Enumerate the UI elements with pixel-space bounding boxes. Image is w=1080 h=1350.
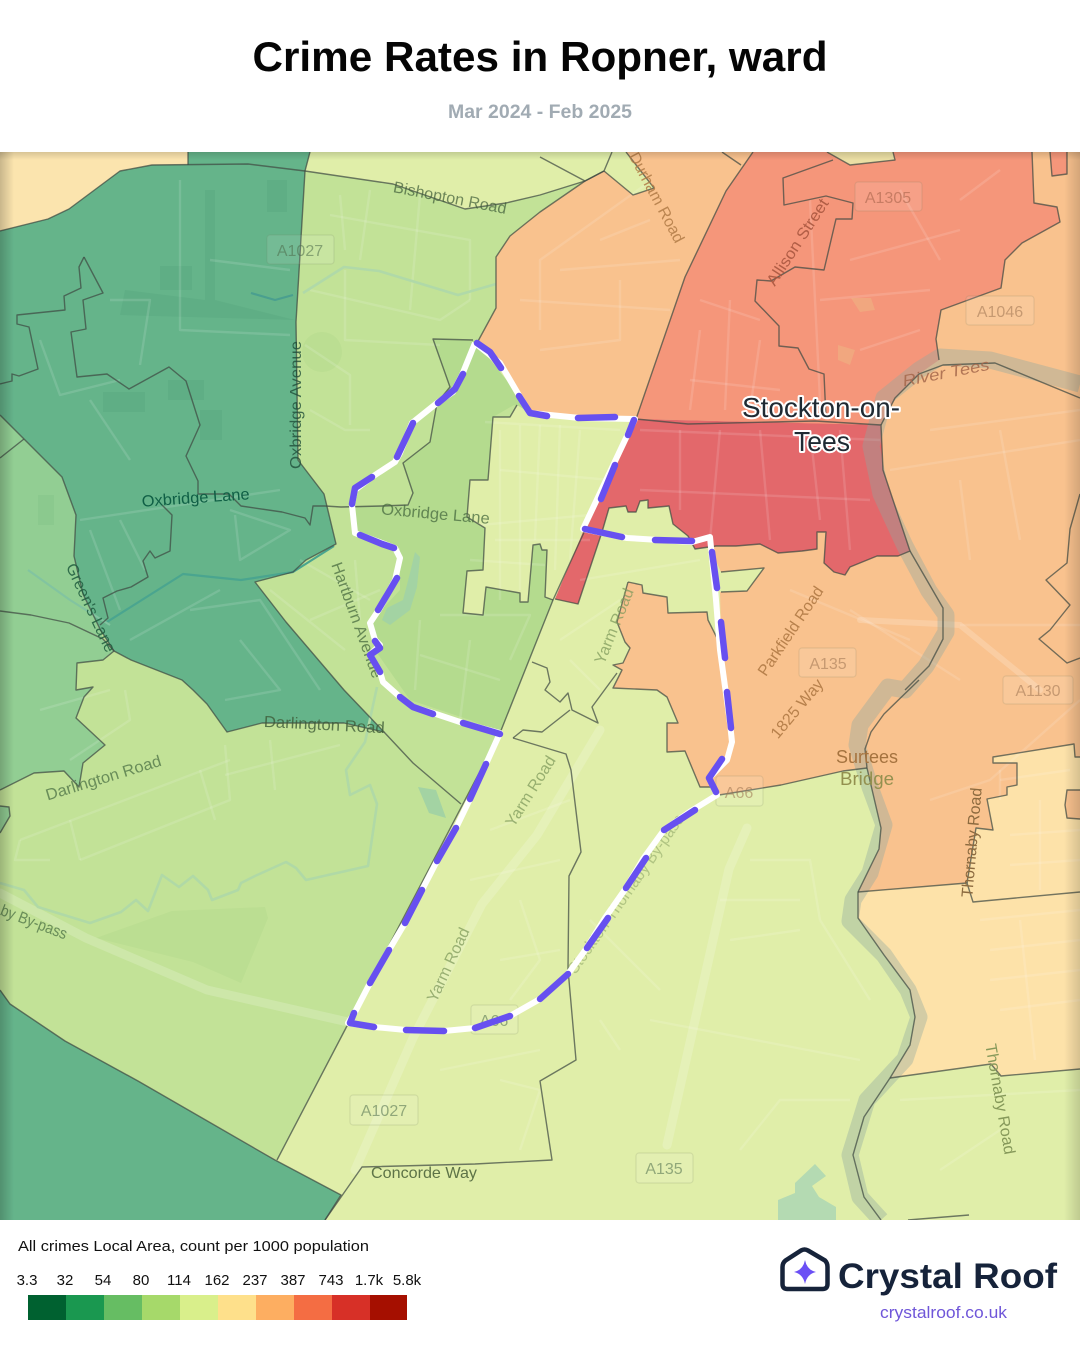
legend title: All crimes Local Area, count per 1000 population [18,1238,369,1255]
region: yellow-green ward core [463,405,636,615]
region: yellow-green top patch [510,152,654,195]
road label: Bishopton Road: Bishopton Road [392,179,508,218]
road label: River Tees: River Tees [901,357,991,390]
road label: Thornaby Road north: Thornaby Road [959,787,986,898]
road label: Yarm Road centre: Yarm Road [503,753,560,830]
road badge: A1046: A1046 [977,304,1023,321]
legend labels: 1.7k [355,1272,384,1289]
map edge shading [0,152,1080,1220]
ward boundary: Ropner [348,343,732,1031]
road label: Darlington Road south: Darlington Road [44,753,164,804]
street network [15,170,1080,1170]
region: red Stockton centre [555,419,910,604]
region: yellow north-west corner [0,152,188,231]
road label: Green's Lane: Green's Lane [62,561,118,655]
legend [17,1238,422,1320]
title: Crime Rates in Ropner, ward [252,33,828,80]
road badge: A1305 [855,182,922,211]
place label: Surtees Bridge [836,747,898,789]
legend labels: 162 [204,1272,230,1289]
region: darker green north ward [353,339,553,733]
road badge: A135 south: A135 [645,1161,683,1178]
stream network [0,267,496,923]
road label: Yarm Road south: Yarm Road [424,925,474,1005]
icon: house outline [782,1250,828,1289]
road badge: A1027 north: A1027 [277,243,323,260]
region: dark green Oxbridge [0,164,384,732]
logo url: crystalroof.co.uk [880,1304,1008,1322]
road badge: A135 south [636,1153,693,1183]
road badge: A1027 north [267,235,334,264]
legend labels: 387 [280,1272,306,1289]
region: green top strip [188,152,310,171]
road label: Darlington Road north: Darlington Road [263,714,385,737]
road badge: A1130: A1130 [1015,683,1061,700]
place label: Stockton-on-Tees: Tees [794,426,850,457]
region: pale top piece [827,152,895,165]
area boundaries [0,152,1080,1220]
road badge: A66 south: A66 [480,1013,508,1030]
road label: Oxbridge Lane east: Oxbridge Lane [380,501,491,528]
road badge: A135 east [799,648,856,677]
road label: Parkfield Road: Parkfield Road [755,584,827,679]
road badge: A66 east [716,776,763,806]
region: small green patch on west edge [0,806,10,833]
region: light yellow Thornaby [858,744,1080,1078]
park and land tint [38,180,875,983]
road label: Oxbridge Avenue: Oxbridge Avenue [288,341,305,469]
region: small orange box [1065,790,1080,819]
legend labels: 3.3 [17,1272,37,1289]
road badge: A1305: A1305 [865,190,911,207]
place label: Stockton-on-Tees [742,392,900,457]
road label: By-pass: by By-pass [0,902,69,943]
subtitle: date range: Mar 2024 - Feb 2025 [448,102,632,123]
logo: Crystal Roof [782,1250,1057,1322]
region: dark green south-west [0,990,341,1220]
place label: Stockton-on-Tees: Stockton-on- [742,392,900,423]
road label: Oxbridge Lane west: Oxbridge Lane [141,486,250,511]
region: mid green west [0,164,636,1160]
road label: Allison Street: Allison Street [764,195,833,289]
road badge: A1027 south [350,1095,418,1125]
road badge: A135 east: A135 [809,656,847,673]
region: salmon centre north [636,152,1060,425]
legend labels [17,1272,422,1289]
road labels [0,150,1073,1183]
legend labels: 743 [318,1272,344,1289]
road label: Thornaby Road south: Thornaby Road [981,1043,1018,1156]
River Tees band [850,357,1080,1220]
road label: Durham Road: Durham Road [625,150,687,246]
legend labels: 54 [95,1272,111,1289]
place label: Surtees Bridge: Surtees [836,747,898,767]
road badge: A1046 [966,296,1034,325]
logo wordmark: Crystal Roof [838,1257,1057,1296]
legend colour scale [28,1295,407,1320]
road badge: A1130 [1003,676,1073,704]
road badge: A66 east: A66 [725,785,753,802]
legend labels: 80 [133,1272,149,1289]
region: orange north [477,152,753,419]
choropleth map [0,150,1080,1220]
icon: purple star [794,1260,816,1284]
water: ponds and lakes [382,552,836,1220]
legend labels: 5.8k [393,1272,422,1289]
road badge: A66 south [471,1005,518,1034]
legend labels: 32 [57,1272,73,1289]
road badge: A1027 south: A1027 [361,1103,407,1120]
road label: Yarm Road north: Yarm Road [592,586,638,667]
legend labels: 114 [167,1272,191,1289]
road label: Stockton-Thornaby By-pass: Stockton-Thornaby By-pass [565,812,688,977]
legend labels: 237 [242,1272,268,1289]
road label: 1825 Way: 1825 Way [768,676,827,742]
major roads [0,620,1040,1170]
place label: Surtees Bridge: Bridge [840,769,894,789]
region: orange east [613,152,1080,892]
region: medium green Green's Lane [0,415,103,639]
road label: Concorde Way: Concorde Way [371,1165,477,1182]
region: medium green south of Green's Lane [0,611,114,790]
road label: Hartburn Avenue: Hartburn Avenue [327,560,385,681]
region: salmon top right [1050,152,1067,176]
